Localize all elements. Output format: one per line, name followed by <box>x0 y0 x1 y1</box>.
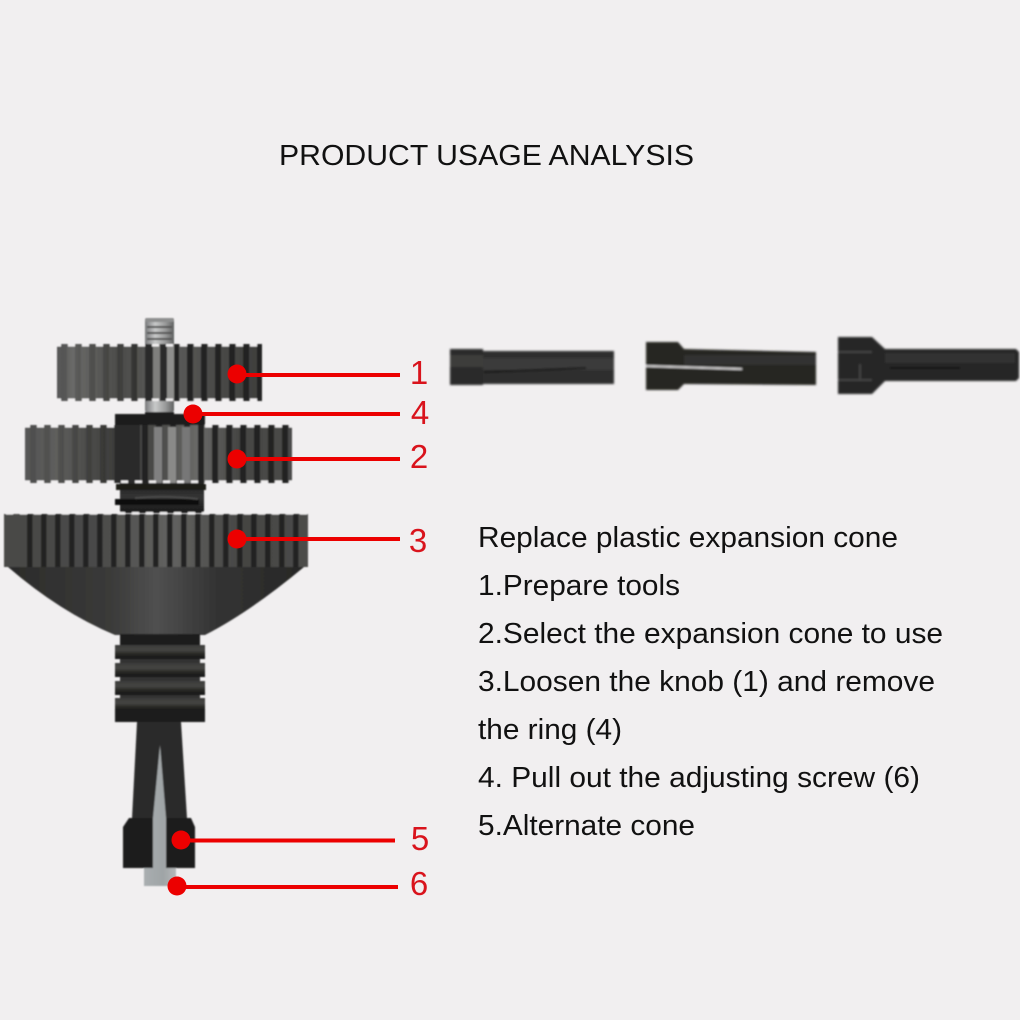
adjusting screw 6 <box>144 745 176 886</box>
callout 2: 2 <box>410 438 428 475</box>
callout 2 <box>228 438 428 475</box>
callout 6 <box>168 865 428 902</box>
callout 3: 3 <box>409 522 427 559</box>
instructions heading: Replace plastic expansion cone <box>478 522 898 554</box>
callout 4 <box>184 394 429 431</box>
step 2: 2.Select the expansion cone to use <box>478 618 943 650</box>
step 3 continued: the ring (4) <box>478 714 622 746</box>
callout 6: 6 <box>410 865 428 902</box>
expansion cone 5 <box>123 818 195 868</box>
callout 1 <box>228 354 428 391</box>
knob 3 with conical base <box>4 512 308 635</box>
threaded neck between knobs 2 and 3 <box>115 482 206 513</box>
step 5: 5.Alternate cone <box>478 810 695 842</box>
lower threaded barrel <box>115 634 205 722</box>
infographic page <box>3 144 1020 896</box>
callout 5 <box>172 820 429 857</box>
callout 3 <box>228 522 427 559</box>
split sleeve legs <box>132 722 187 818</box>
step 1: 1.Prepare tools <box>478 570 680 602</box>
product diagram: adjustable tool <box>4 318 308 886</box>
knob 1 <box>57 344 262 401</box>
callout 1: 1 <box>410 354 428 391</box>
callout 4: 4 <box>411 394 429 431</box>
callout 5: 5 <box>411 820 429 857</box>
ring 4 <box>115 412 205 425</box>
instructions text block <box>478 522 943 842</box>
threaded screw tip <box>145 318 174 412</box>
step 3: 3.Loosen the knob (1) and remove <box>478 666 935 698</box>
expansion cone A <box>450 349 614 385</box>
title: PRODUCT USAGE ANALYSIS <box>279 140 694 172</box>
step 4: 4. Pull out the adjusting screw (6) <box>478 762 920 794</box>
knob 2 <box>25 425 292 483</box>
expansion cone B <box>646 342 816 390</box>
expansion cone C <box>838 337 1019 394</box>
